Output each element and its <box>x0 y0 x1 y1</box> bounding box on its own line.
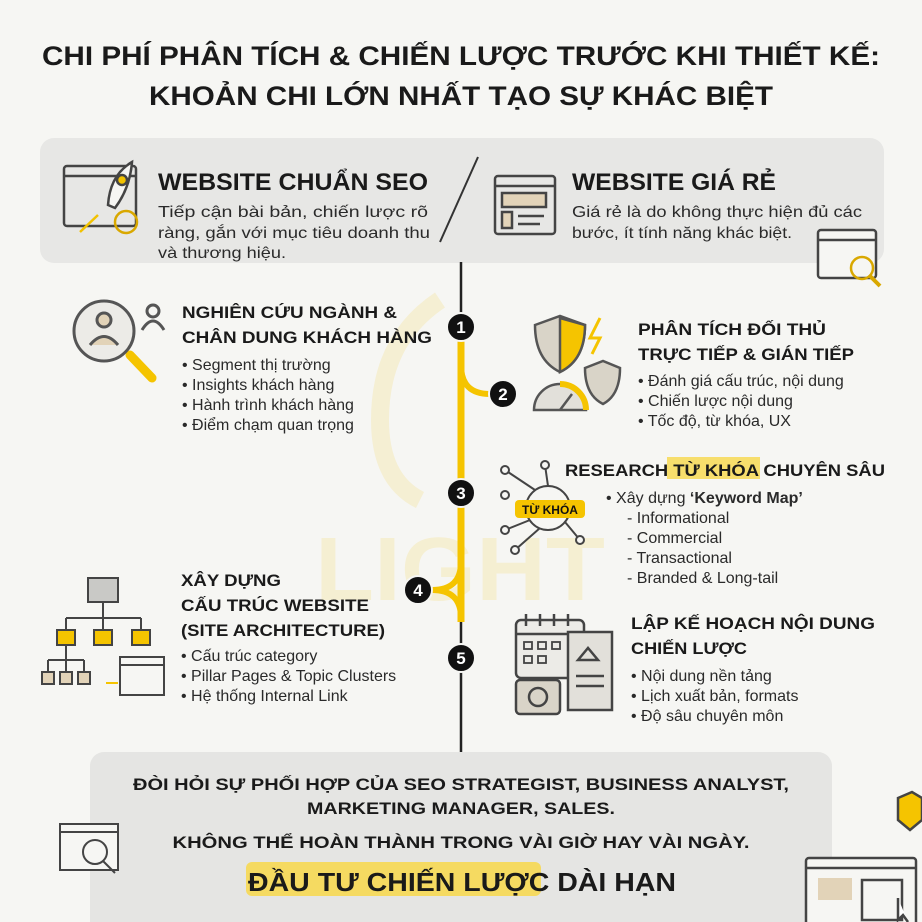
bullets <box>638 373 844 430</box>
bullets: • Điểm chạm quan trọng <box>182 416 354 434</box>
text: coordination: MARKETING MANAGER, SALES. <box>307 799 615 818</box>
icon: magnifier browser <box>818 230 880 286</box>
icon: calendar camera doc <box>516 614 612 714</box>
text: coordination: KHÔNG THỂ HOÀN THÀNH TRONG VÀI GIỜ HAY VÀI NGÀY. <box>172 833 750 852</box>
bullets: • Xây dựng ‘Keyword Map’ <box>606 490 803 507</box>
step 3 <box>447 479 475 507</box>
heading: CHIẾN LƯỢC <box>631 639 747 658</box>
bullets: • Pillar Pages & Topic Clusters <box>181 668 396 685</box>
bullets: - Branded & Long-tail <box>627 570 778 587</box>
step 1: 1 <box>456 318 466 337</box>
heading <box>181 571 385 640</box>
icon: keyword network <box>501 461 585 554</box>
bullets: • Lịch xuất bản, formats <box>631 688 798 705</box>
section 4: site architecture <box>42 571 396 705</box>
heading: NGHIÊN CỨU NGÀNH & <box>182 303 397 322</box>
section 3: keyword <box>501 457 885 587</box>
step 2 <box>489 380 517 408</box>
bullets <box>631 668 798 725</box>
title: CHI PHÍ PHÂN TÍCH & CHIẾN LƯỢC TRƯỚC KHI THIẾT KẾ: <box>42 40 880 71</box>
bullets: • Tốc độ, từ khóa, UX <box>638 413 791 430</box>
heading: (SITE ARCHITECTURE) <box>181 621 385 640</box>
section 5: content plan <box>516 614 875 725</box>
icon: browser cursor <box>806 792 922 922</box>
bullets: • Chiến lược nội dung <box>638 393 793 410</box>
step 3: 3 <box>456 484 466 503</box>
heading: PHÂN TÍCH ĐỐI THỦ <box>638 319 826 339</box>
text: coordination: ĐÒI HỎI SỰ PHỐI HỢP CỦA SEO STRATEGIST, BUSINESS ANALYST, <box>133 774 789 794</box>
text: seo description <box>158 204 430 262</box>
heading: website giá rẻ: WEBSITE GIÁ RẺ <box>572 167 776 196</box>
heading: LẬP KẾ HOẠCH NỘI DUNG <box>631 614 875 633</box>
watermark logo: LIGHT <box>315 520 605 620</box>
icon: cheap website <box>495 176 555 234</box>
bullets: • Nội dung nền tảng <box>631 668 772 685</box>
timeline <box>404 262 517 752</box>
step 1 <box>447 313 475 341</box>
text: coordination <box>133 774 789 852</box>
icon: sitemap <box>42 578 164 695</box>
panel: conclusion <box>60 752 832 922</box>
icon: rocket browser <box>64 162 137 233</box>
heading: TRỰC TIẾP & GIÁN TIẾP <box>638 345 854 364</box>
headline: long-term investment: ĐẦU TƯ CHIẾN LƯỢC DÀI HẠN <box>248 867 676 897</box>
text: cheap description: Giá rẻ là do không thực hiện đủ các <box>572 204 862 221</box>
title <box>42 40 880 111</box>
bullets: • Segment thị trường <box>182 357 331 374</box>
text: seo description: ràng, gắn với mục tiêu doanh thu <box>158 223 430 242</box>
bullets: • Đánh giá cấu trúc, nội dung <box>638 373 844 390</box>
icon: shields and gauge <box>534 316 620 410</box>
step 4 <box>404 576 432 604</box>
text: seo description: và thương hiệu. <box>158 245 286 262</box>
icon: keyword network: TỪ KHÓA <box>522 502 578 517</box>
section 2: competitors <box>534 316 854 430</box>
bullets <box>606 490 803 587</box>
bullets: • Độ sâu chuyên môn <box>631 708 783 725</box>
watermark logo <box>315 300 605 620</box>
bullets: • Hệ thống Internal Link <box>181 688 349 705</box>
bullets <box>182 357 354 434</box>
bullets: - Commercial <box>627 530 722 547</box>
panel: comparison <box>40 138 884 286</box>
bullets: • Hành trình khách hàng <box>182 397 354 414</box>
step 2: 2 <box>498 385 508 404</box>
icon: analytics browser <box>60 824 118 873</box>
heading <box>638 319 854 364</box>
text: seo description: Tiếp cận bài bản, chiến lược rõ <box>158 204 428 221</box>
icon: magnifier person <box>74 301 164 378</box>
bullets: • Insights khách hàng <box>182 377 334 394</box>
heading <box>631 614 875 658</box>
step 4: 4 <box>413 581 423 600</box>
step 5 <box>447 644 475 672</box>
text: cheap description: bước, ít tính năng khác biệt. <box>572 225 792 242</box>
step 5: 5 <box>456 649 466 668</box>
bullets: - Informational <box>627 510 729 527</box>
section 1: research <box>74 301 432 434</box>
text: cheap description <box>572 204 862 242</box>
heading: CHÂN DUNG KHÁCH HÀNG <box>182 328 432 347</box>
heading: CẤU TRÚC WEBSITE <box>181 596 369 615</box>
bullets: - Transactional <box>627 550 732 567</box>
heading: website chuẩn seo: WEBSITE CHUẨN SEO <box>158 168 428 196</box>
heading <box>182 303 432 347</box>
heading: RESEARCH TỪ KHÓA CHUYÊN SÂU <box>565 461 885 480</box>
bullets: • Cấu trúc category <box>181 648 317 665</box>
title: KHOẢN CHI LỚN NHẤT TẠO SỰ KHÁC BIỆT <box>149 79 774 111</box>
bullets <box>181 648 396 705</box>
heading: XÂY DỰNG <box>181 571 281 590</box>
